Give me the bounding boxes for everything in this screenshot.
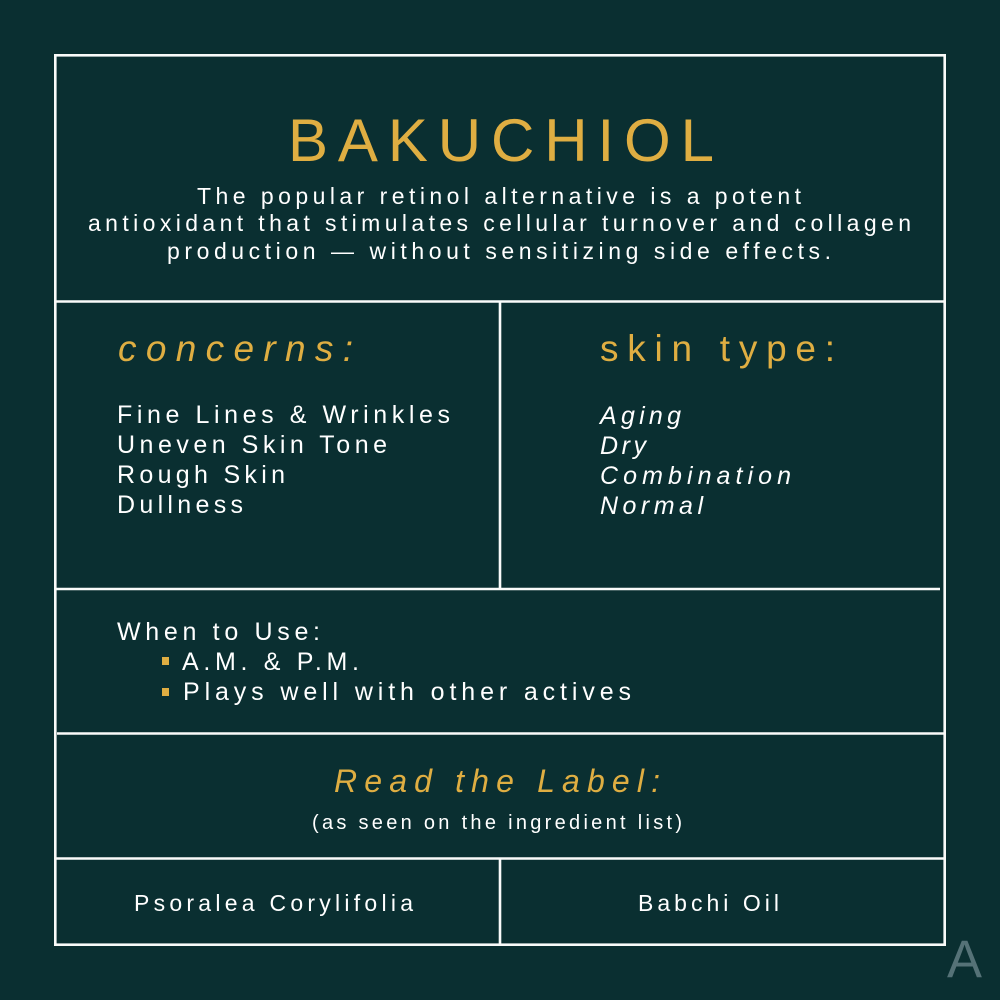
skin type list <box>598 402 791 520</box>
panel: read the label <box>312 763 682 834</box>
concerns list: Dullness <box>117 491 243 519</box>
skin type list: Normal <box>600 492 704 520</box>
panel: skin type <box>598 328 835 520</box>
intro text: production — without sensitizing side effects. <box>167 238 831 264</box>
grid frame <box>55 55 945 945</box>
skin type list: Dry <box>600 432 648 460</box>
logo mark: A <box>947 930 983 989</box>
intro text: antioxidant that stimulates cellular turnover and collagen <box>88 210 911 236</box>
ingredient name: Psoralea Corylifolia: Psoralea Corylifolia <box>134 890 413 916</box>
bullet: plays well: Plays well with other actives <box>183 678 631 706</box>
concerns list <box>117 401 450 519</box>
title: BAKUCHIOL <box>288 107 714 174</box>
concerns heading: concerns: <box>118 328 353 369</box>
ingredient name: Babchi Oil: Babchi Oil <box>638 890 779 916</box>
concerns list: Fine Lines & Wrinkles <box>117 401 450 429</box>
skin type list: Aging <box>598 402 681 430</box>
bullet: A.M. & P.M.: A.M. & P.M. <box>182 648 359 676</box>
when to use heading: When to Use: <box>117 618 320 646</box>
intro text <box>88 183 911 264</box>
concerns list: Rough Skin <box>117 461 285 489</box>
read the label heading: Read the Label: <box>334 763 660 799</box>
concerns list: Uneven Skin Tone <box>117 431 387 459</box>
skin type list: Combination <box>600 462 791 490</box>
skin type heading: skin type: <box>600 328 835 369</box>
panel: concerns <box>117 328 450 519</box>
panel: when to use <box>117 618 631 706</box>
intro text: The popular retinol alternative is a potent <box>197 183 802 209</box>
read the label note: (as seen on the ingredient list) <box>312 812 682 834</box>
